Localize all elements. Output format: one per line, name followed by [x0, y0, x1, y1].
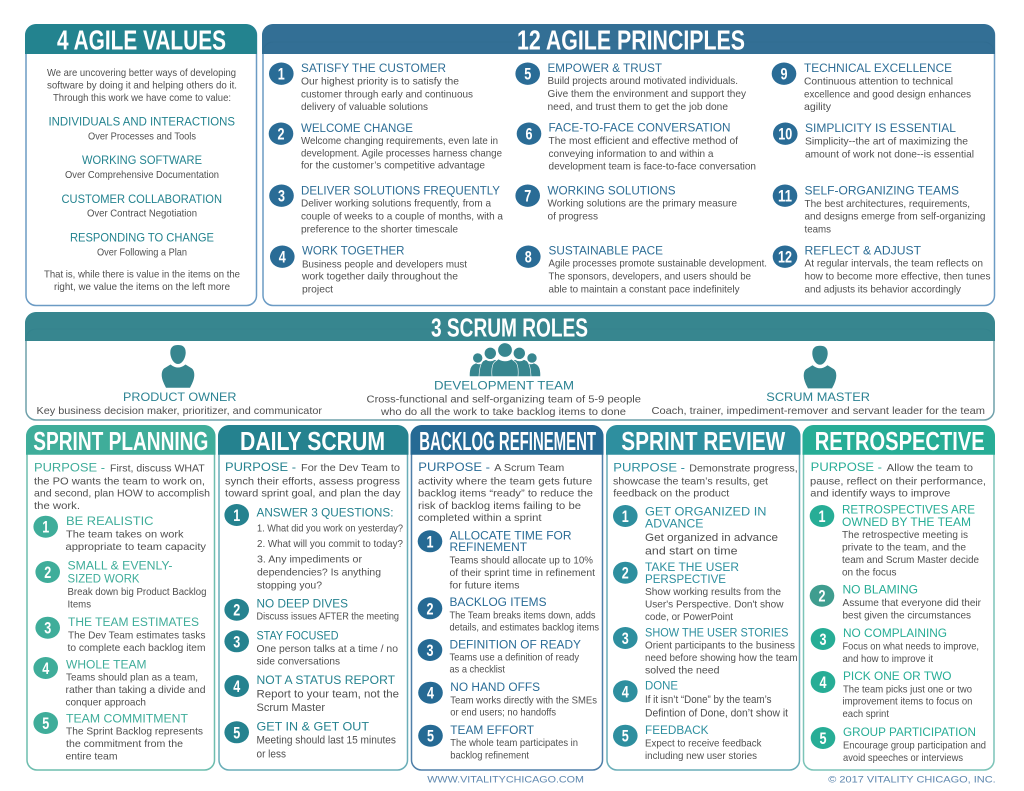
item 2: Assume that everyone did their: [842, 597, 981, 609]
purpose text: showcase the team’s results, get: [613, 475, 768, 487]
principle 1: [269, 61, 473, 113]
item 4: 4: [820, 673, 827, 692]
principle 11: teams: [804, 224, 831, 236]
principle 12: 12: [778, 248, 792, 267]
item 2: [35, 559, 207, 610]
role: scrum master: [652, 346, 985, 417]
principle 5: 5: [524, 65, 531, 84]
item 1: ANSWER 3 QUESTIONS:: [256, 505, 394, 519]
purpose text: [225, 460, 401, 500]
item 4: PICK ONE OR TWO: [843, 669, 952, 683]
item 3: [613, 625, 798, 676]
principle 5: Build projects around motivated individuals.: [548, 75, 738, 87]
principle 5: Give them the environment and support they: [548, 88, 747, 100]
item 3: 3: [820, 630, 826, 649]
principle 2: WELCOME CHANGE: [301, 121, 413, 135]
principle 7: [515, 184, 737, 223]
item 5: 5: [820, 729, 826, 748]
item 5: GET IN & GET OUT: [256, 720, 369, 734]
item 3: One person talks at a time / no: [256, 643, 398, 655]
item 4: NO HAND OFFS: [450, 680, 540, 694]
item 4: WHOLE TEAM: [66, 657, 146, 671]
panel: daily scrum: [218, 425, 408, 770]
item 5: [613, 723, 762, 762]
item 1: [418, 528, 595, 591]
purpose text: pause, reflect on their performance,: [810, 475, 986, 487]
item 3: as a checklist: [450, 664, 505, 676]
purpose text: activity where the team gets future: [418, 475, 592, 487]
principle 5: need, and trust them to get the job done: [548, 101, 728, 113]
heading: 12 agile principles: 12 AGILE PRINCIPLES: [517, 24, 745, 56]
principle 11: 11: [778, 187, 792, 206]
principle 4: 4: [279, 248, 286, 267]
item 5: [811, 725, 986, 764]
principle 3: couple of weeks to a couple of months, with a: [301, 211, 503, 223]
item 1: 1: [622, 507, 629, 526]
item 2: BACKLOG ITEMS: [450, 595, 546, 609]
principle 8: able to maintain a constant pace indefinitely: [548, 283, 740, 295]
item 1: The retrospective meeting is: [842, 529, 968, 541]
panel: retrospective: [802, 425, 995, 770]
purpose text: the PO wants the team to work on,: [34, 475, 205, 487]
value 4: RESPONDING TO CHANGE: [70, 230, 214, 244]
intro text: [47, 67, 237, 104]
principle 11: The best architectures, requirements,: [804, 198, 970, 210]
item 5: the commitment from the: [66, 738, 183, 750]
item 1: of their sprint time in refinement: [450, 567, 595, 579]
item 3: 3: [233, 632, 240, 651]
item 1: team and Scrum Master decide: [842, 554, 979, 566]
item 4: 4: [42, 659, 50, 678]
value 2: WORKING SOFTWARE: [82, 153, 202, 167]
principle 9: excellence and good design enhances: [804, 89, 971, 101]
closing text: [44, 268, 240, 293]
item 5: FEEDBACK: [645, 723, 709, 737]
item 1: [33, 514, 207, 553]
purpose text: completed within a sprint: [418, 512, 542, 524]
item 2: 2: [426, 599, 434, 618]
item 3: and how to improve it: [842, 653, 933, 665]
panel: sprint planning: [26, 425, 216, 770]
item 1: private to the team, and the: [842, 542, 966, 554]
value 1: [48, 115, 235, 143]
item 2: Break down big Product Backlog: [68, 586, 207, 598]
item 3: Teams use a definition of ready: [450, 651, 580, 663]
item 2: 2: [44, 563, 51, 582]
principle 6: The most efficient and effective method of: [548, 135, 738, 147]
item 5: [418, 723, 578, 761]
item 3: [418, 637, 581, 676]
principle 3: preference to the shorter timescale: [301, 224, 458, 236]
intro text: We are uncovering better ways of developing: [47, 67, 236, 79]
item 5: Meeting should last 15 minutes: [256, 735, 396, 747]
value 2: Over Comprehensive Documentation: [65, 169, 219, 181]
item 2: 2: [818, 587, 826, 606]
principle 12: At regular intervals, the team reflects on: [804, 258, 983, 270]
item 4: Scrum Master: [256, 702, 325, 714]
principle 4: [270, 244, 467, 296]
principle 12: and adjusts its behavior accordingly: [804, 284, 962, 296]
item 5: [33, 711, 203, 762]
item 1: appropriate to team capacity: [66, 541, 207, 553]
principle 6: development team is face-to-face conversation: [548, 161, 756, 173]
principle 1: 1: [278, 65, 285, 84]
panel: 12 agile principles: [262, 24, 995, 306]
item 1: RETROSPECTIVES ARE: [842, 503, 975, 517]
item 1: on the focus: [842, 566, 896, 578]
principle 9: [772, 61, 971, 113]
role: product owner: [36, 345, 323, 417]
principle 2: 2: [278, 125, 284, 144]
item 3: The Dev Team estimates tasks: [68, 630, 206, 642]
principle 4: work together daily throughout the: [301, 271, 458, 283]
item 1: 2. What will you commit to today?: [257, 538, 403, 550]
item 4: [418, 680, 597, 719]
principle 4: WORK TOGETHER: [302, 244, 405, 258]
item 1: The team takes on work: [66, 528, 184, 540]
item 3: 3: [622, 629, 629, 648]
principle 8: Agile processes promote sustainable development.: [548, 258, 767, 270]
item 4: 4: [233, 677, 241, 696]
item 4: Teams should plan as a team,: [66, 672, 198, 684]
item 1: 1: [818, 507, 826, 526]
item 4: NOT A STATUS REPORT: [256, 673, 395, 687]
principle 8: 8: [525, 248, 532, 267]
icon: scrum master person: [804, 346, 836, 388]
intro text: software by doing it and helping others do it.: [47, 80, 237, 92]
item 5: 5: [622, 727, 629, 746]
item 1: stopping you?: [257, 579, 322, 591]
purpose text: For the Dev Team to: [301, 462, 400, 474]
principle 3: Deliver working solutions frequently, from a: [301, 198, 491, 210]
value 4: [70, 230, 214, 259]
item 5: 5: [42, 714, 49, 733]
principle 7: WORKING SOLUTIONS: [548, 184, 676, 198]
role: product owner: Key business decision maker, prioritizer, and communicator: [36, 405, 323, 417]
item 4: 4: [427, 684, 434, 703]
item 5: backlog refinement: [450, 749, 529, 761]
item 1: [613, 504, 778, 557]
heading: sprint planning: SPRINT PLANNING: [33, 426, 208, 456]
item 2: [613, 560, 784, 623]
principle 2: for the customer’s competitive advantage: [301, 159, 485, 171]
item 3: [224, 629, 398, 668]
value 1: Over Processes and Tools: [88, 131, 196, 143]
item 2: TAKE THE USER: [645, 560, 739, 574]
item 5: The whole team participates in: [450, 737, 578, 749]
item 2: 2: [233, 601, 240, 620]
item 4: [224, 673, 399, 714]
heading: 4 agile values: 4 AGILE VALUES: [57, 24, 226, 56]
principle 7: 7: [524, 187, 531, 206]
purpose text: PURPOSE -: [225, 460, 296, 474]
purpose text: PURPOSE -: [34, 461, 105, 475]
item 4: [613, 678, 788, 719]
purpose text: PURPOSE -: [418, 460, 490, 474]
item 1: OWNED BY THE TEAM: [842, 515, 971, 529]
purpose text: toward sprint goal, and plan the day: [225, 488, 401, 500]
item 2: [810, 583, 981, 621]
principle 8: The sponsors, developers, and users should be: [548, 270, 751, 282]
icon: development team group: [469, 343, 541, 376]
role: product owner: PRODUCT OWNER: [123, 390, 237, 404]
principle 12: how to become more effective, then tunes: [804, 271, 990, 283]
item 5: TEAM COMMITMENT: [66, 711, 188, 725]
item 5: 5: [427, 727, 434, 746]
principle 12: [773, 244, 990, 296]
item 1: 3. Any impediments or: [257, 553, 363, 565]
item 1: [224, 504, 403, 591]
principle 1: Our highest priority is to satisfy the: [301, 76, 459, 88]
principle 7: of progress: [548, 211, 598, 223]
principle 2: [269, 121, 502, 171]
role: development team: Cross-functional and self-organizing team of 5-9 people: [366, 394, 641, 406]
item 1: 1. What did you work on yesterday?: [257, 523, 403, 535]
footer: website: WWW.VITALITYCHICAGO.COM: [427, 775, 584, 786]
item 2: best given the circumstances: [842, 609, 971, 621]
item 3: Focus on what needs to improve,: [842, 641, 979, 653]
principle 10: [773, 121, 974, 161]
principle 10: 10: [778, 125, 792, 144]
item 3: SHOW THE USER STORIES: [645, 625, 788, 639]
item 4: DONE: [645, 678, 678, 692]
intro text: Through this work we have come to value:: [53, 92, 231, 104]
item 3: STAY FOCUSED: [256, 629, 339, 643]
purpose text: synch their efforts, assess progress: [225, 475, 400, 487]
item 5: avoid speeches or interviews: [843, 752, 963, 764]
principle 9: TECHNICAL EXCELLENCE: [804, 61, 952, 75]
principle 1: delivery of valuable solutions: [301, 101, 428, 113]
item 4: or end users; no handoffs: [450, 707, 556, 719]
principle 12: REFLECT & ADJUST: [804, 244, 921, 258]
item 4: Report to your team, not the: [256, 688, 399, 700]
item 1: 1: [233, 506, 240, 525]
item 5: or less: [256, 748, 286, 760]
principle 4: Business people and developers must: [302, 258, 467, 270]
value 4: Over Following a Plan: [97, 247, 187, 259]
item 4: [33, 657, 206, 709]
item 3: [35, 615, 206, 654]
item 4: each sprint: [842, 708, 889, 720]
item 3: 3: [44, 619, 51, 638]
panel: sprint review: [606, 425, 800, 770]
item 2: Discuss issues AFTER the meeting: [256, 611, 399, 623]
principle 10: SIMPLICITY IS ESSENTIAL: [805, 121, 956, 135]
purpose text: feedback on the product: [613, 488, 729, 500]
item 2: NO BLAMING: [842, 583, 918, 597]
value 3: CUSTOMER COLLABORATION: [62, 192, 222, 206]
principle 11: and designs emerge from self-organizing: [804, 211, 986, 223]
item 4: Team works directly with the SMEs: [450, 694, 597, 706]
principle 9: 9: [780, 65, 788, 84]
closing text: right, we value the items on the left more: [54, 281, 230, 293]
principle 11: [773, 184, 986, 236]
item 3: need before showing how the team: [645, 652, 798, 664]
item 1: GET ORGANIZED IN: [645, 504, 766, 518]
item 3: to complete each backlog item: [68, 642, 206, 654]
item 3: THE TEAM ESTIMATES: [68, 615, 199, 629]
purpose text: First, discuss WHAT: [110, 463, 205, 475]
item 2: Items: [68, 598, 91, 610]
item 5: including new user stories: [645, 750, 757, 762]
item 5: GROUP PARTICIPATION: [843, 725, 976, 739]
principle 9: Continuous attention to technical: [804, 76, 953, 88]
item 4: If it isn’t “Done” by the team’s: [645, 694, 772, 706]
principle 11: SELF-ORGANIZING TEAMS: [804, 184, 959, 198]
item 1: Teams should allocate up to 10%: [450, 555, 593, 567]
item 3: solved the need: [645, 664, 720, 676]
principle 9: agility: [804, 101, 832, 113]
item 3: [811, 626, 979, 665]
purpose text: and identify ways to improve: [810, 488, 950, 500]
item 2: [224, 596, 399, 623]
purpose text: PURPOSE -: [613, 461, 685, 475]
item 4: Defintion of Done, don’t show it: [645, 707, 788, 719]
heading: 3 scrum roles: 3 SCRUM ROLES: [431, 313, 588, 343]
purpose text: and second, plan HOW to accomplish: [34, 488, 210, 500]
role: scrum master: SCRUM MASTER: [766, 390, 870, 404]
value 1: INDIVIDUALS AND INTERACTIONS: [48, 115, 235, 129]
item 2: 2: [622, 564, 629, 583]
item 4: 4: [622, 682, 629, 701]
purpose text: backlog items “ready” to reduce the: [418, 488, 593, 500]
value 3: [62, 192, 222, 220]
item 3: side conversations: [256, 656, 340, 668]
item 4: conquer approach: [66, 697, 146, 709]
principle 3: 3: [278, 187, 285, 206]
principle 5: EMPOWER & TRUST: [548, 61, 662, 75]
panel: 3 scrum roles: [25, 312, 995, 420]
principle 1: customer through early and continuous: [301, 89, 473, 101]
item 1: 1: [42, 518, 49, 537]
item 2: code, or PowerPoint: [645, 611, 733, 623]
panel: backlog refinement: [410, 425, 604, 770]
item 2: details, and estimates backlog items: [450, 622, 599, 634]
principle 10: amount of work not done--is essential: [805, 149, 974, 161]
role: development team: who do all the work to take backlog items to done: [380, 406, 626, 418]
item 1: dependencies? Is anything: [257, 567, 381, 579]
principle 3: [269, 184, 503, 236]
principle 1: SATISFY THE CUSTOMER: [301, 61, 446, 75]
principle 4: project: [302, 284, 333, 296]
value 3: Over Contract Negotiation: [87, 208, 197, 220]
purpose text: Allow the team to: [887, 462, 973, 474]
purpose text: PURPOSE -: [811, 460, 882, 474]
item 1: 1: [426, 532, 434, 551]
item 1: REFINEMENT: [450, 540, 527, 554]
item 3: 3: [426, 641, 434, 660]
item 3: DEFINITION OF READY: [450, 637, 581, 651]
role: development team: [366, 343, 641, 418]
item 4: improvement items to focus on: [842, 696, 973, 708]
purpose text: the work.: [34, 500, 80, 512]
item 1: BE REALISTIC: [66, 514, 154, 528]
item 1: ALLOCATE TIME FOR: [450, 528, 572, 542]
heading: sprint review: SPRINT REVIEW: [621, 426, 786, 456]
item 5: TEAM EFFORT: [450, 723, 534, 737]
principle 2: Welcome changing requirements, even late in: [301, 135, 498, 147]
item 1: [810, 503, 979, 578]
role: development team: DEVELOPMENT TEAM: [434, 379, 574, 393]
role: scrum master: Coach, trainer, impediment-remover and servant leader for the team: [652, 405, 985, 417]
principle 6: conveying information to and within a: [548, 148, 714, 160]
heading: backlog refinement: BACKLOG REFINEMENT: [419, 426, 596, 456]
principle 8: SUSTAINABLE PACE: [548, 243, 663, 257]
item 2: PERSPECTIVE: [645, 572, 726, 586]
item 1: ADVANCE: [645, 516, 704, 530]
principle 3: DELIVER SOLUTIONS FREQUENTLY: [301, 184, 500, 198]
item 2: NO DEEP DIVES: [256, 596, 348, 610]
item 1: Get organized in advance: [645, 532, 778, 544]
item 5: [224, 720, 396, 760]
footer: copyright: © 2017 VITALITY CHICAGO, INC.: [828, 775, 996, 786]
icon: product owner person: [162, 345, 194, 388]
heading: daily scrum: DAILY SCRUM: [240, 426, 385, 456]
item 2: [418, 595, 599, 634]
item 4: [811, 669, 973, 720]
item 1: for future items: [450, 579, 520, 591]
purpose text: A Scrum Team: [494, 462, 565, 474]
principle 6: 6: [526, 125, 532, 144]
purpose text: [418, 460, 593, 524]
purpose text: [810, 460, 986, 500]
principle 7: Working solutions are the primary measure: [548, 198, 737, 210]
item 4: The team picks just one or two: [843, 683, 972, 695]
panel: 4 agile values: [25, 24, 257, 306]
item 4: rather than taking a divide and: [66, 684, 206, 696]
item 2: SIZED WORK: [68, 571, 140, 585]
item 5: 5: [233, 723, 240, 742]
item 2: Show working results from the: [645, 586, 781, 598]
principle 2: development. Agile processes harness change: [301, 147, 502, 159]
item 2: User's Perspective. Don't show: [645, 599, 784, 611]
item 5: entire team: [66, 750, 118, 762]
principle 6: [517, 120, 756, 173]
item 2: The Team breaks items down, adds: [450, 609, 596, 621]
purpose text: [34, 461, 210, 512]
purpose text: risk of backlog items failing to be: [418, 500, 581, 512]
item 3: Orient participants to the business: [645, 640, 795, 652]
item 5: The Sprint Backlog represents: [66, 726, 203, 738]
principle 6: FACE-TO-FACE CONVERSATION: [548, 120, 730, 134]
item 1: and start on time: [645, 545, 738, 557]
purpose text: [613, 461, 798, 500]
purpose text: Demonstrate progress,: [689, 463, 798, 475]
closing text: That is, while there is value in the items on the: [44, 268, 240, 280]
principle 8: [516, 243, 767, 295]
item 2: SMALL & EVENLY-: [68, 559, 172, 573]
principle 10: Simplicity--the art of maximizing the: [805, 136, 968, 148]
value 2: [65, 153, 219, 181]
item 5: Expect to receive feedback: [645, 738, 762, 750]
item 3: NO COMPLAINING: [843, 626, 947, 640]
principle 5: [515, 61, 747, 113]
item 5: Encourage group participation and: [843, 740, 986, 752]
